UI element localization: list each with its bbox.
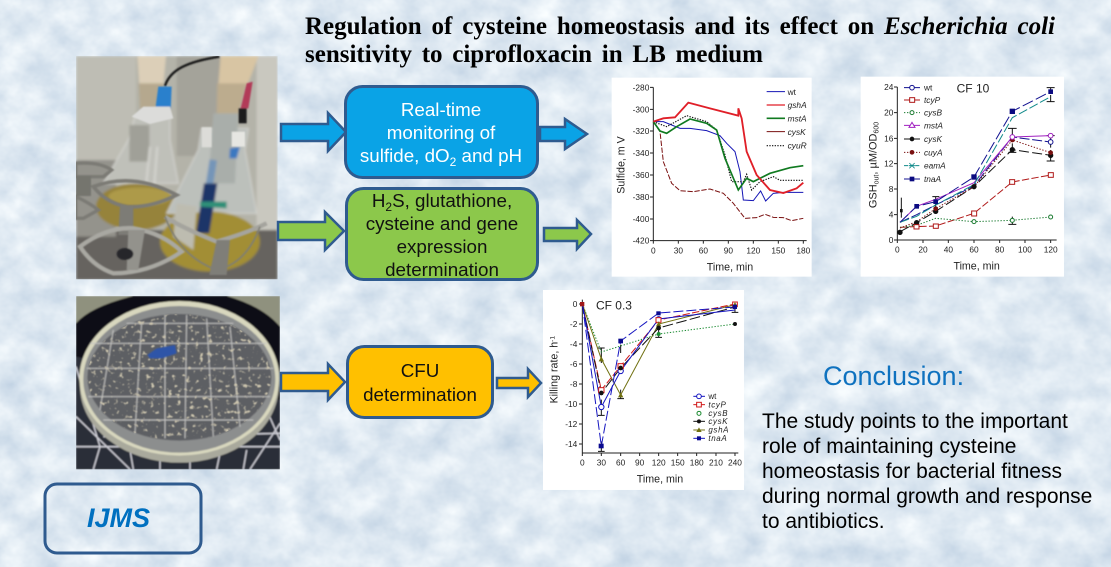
chart: sulfide over time: 180 [796, 245, 811, 255]
box: real-time monitoring: monitoring of [387, 122, 496, 143]
legend: tcyP [708, 400, 727, 409]
chart: GSH out at CF 10: 0 [895, 245, 900, 255]
chart: killing rate at CF 0.3: -10 [565, 399, 578, 409]
legend: cysB [708, 409, 728, 418]
chart: GSH out at CF 10: 120 [1044, 245, 1058, 255]
chart: sulfide over time: Time, min [707, 262, 753, 274]
chart: GSH out at CF 10: , µM/OD [868, 133, 880, 175]
chart: sulfide over time: 90 [724, 245, 733, 255]
chart: GSH out at CF 10: 80 [995, 245, 1005, 255]
chart: killing rate at CF 0.3: 90 [635, 458, 645, 468]
arrow: orange into CFU box [281, 364, 345, 400]
chart: killing rate at CF 0.3: 240 [728, 458, 742, 468]
legend: eamA [924, 161, 946, 171]
chart: sulfide over time: -380 [633, 192, 650, 202]
box: CFU determination: CFU [401, 360, 439, 381]
chart: GSH out at CF 10: 100 [1018, 245, 1032, 255]
series lines [900, 92, 1051, 232]
chart: GSH out at CF 10: 20 [918, 245, 928, 255]
conclusion text: to antibiotics. [762, 510, 885, 533]
chart: killing rate at CF 0.3: -8 [570, 379, 578, 389]
arrow: blue to sulfide chart [540, 119, 587, 149]
chart: GSH out at CF 10: 8 [889, 184, 894, 194]
chart: GSH out at CF 10: 0 [889, 235, 894, 245]
legend: tcyP [924, 95, 941, 105]
series markers [897, 89, 1053, 235]
chart: sulfide over time: cyuR [788, 141, 807, 151]
chart: killing rate at CF 0.3: 0 [580, 458, 585, 468]
conclusion text: homeostasis for bacterial fitness [762, 460, 1062, 483]
chart: killing rate at CF 0.3: CF 0.3 [596, 299, 632, 313]
box: gene expression determination: H [372, 190, 385, 211]
box: real-time monitoring: sulfide, dO [360, 145, 450, 166]
box: real-time monitoring: and pH [456, 145, 522, 166]
legend: mstA [924, 120, 943, 130]
chart: GSH out at CF 10: 40 [944, 245, 953, 255]
chart: killing rate at CF 0.3: 120 [652, 458, 666, 468]
journal badge: IJMS: IJMS [87, 503, 150, 533]
chart: sulfide over time: -420 [633, 236, 650, 246]
chart: sulfide over time [612, 78, 812, 277]
chart: sulfide over time: 60 [699, 245, 708, 255]
box: gene expression determination: determination [385, 259, 499, 280]
box: CFU determination: determination [363, 384, 477, 405]
legend: tnaA [924, 174, 942, 184]
legend: wt [923, 82, 933, 92]
chart: killing rate at CF 0.3: -12 [565, 419, 578, 429]
chart: sulfide over time: -340 [633, 148, 650, 158]
chart: sulfide over time: -300 [633, 104, 650, 114]
box: gene expression determination: cysteine and gene [366, 213, 518, 234]
chart: GSH out at CF 10: 4 [889, 210, 894, 220]
legend: cysK [708, 417, 728, 426]
chart: killing rate at CF 0.3: -2 [570, 319, 578, 329]
chart: sulfide over time: -320 [633, 126, 650, 136]
chart: killing rate at CF 0.3: 180 [690, 458, 704, 468]
chart: killing rate at CF 0.3: Killing rate, h [549, 342, 561, 403]
arrow: blue into monitoring box [281, 113, 346, 151]
title line 1: Regulation of cysteine homeostasis and its effect on Escherichia coli [305, 13, 1055, 40]
box: gene expression determination [346, 188, 538, 280]
chart: sulfide over time: 120 [746, 245, 761, 255]
chart: GSH out at CF 10: CF 10 [957, 81, 990, 95]
chart: GSH out at CF 10: 16 [884, 133, 894, 143]
chart: GSH out at CF 10: 600 [874, 122, 881, 133]
chart: killing rate at CF 0.3: 60 [616, 458, 626, 468]
box: real-time monitoring: Real-time [401, 99, 481, 120]
chart: killing rate at CF 0.3: -4 [570, 339, 578, 349]
photo: flasks with probes [76, 56, 278, 280]
conclusion text: during normal growth and response [762, 485, 1092, 508]
arrow: green to GSH chart [544, 220, 591, 249]
arrow: orange to killing rate chart [497, 369, 541, 397]
chart: sulfide over time: mstA [788, 114, 807, 124]
series markers [580, 302, 738, 448]
chart: killing rate at CF 0.3: 0 [573, 299, 578, 309]
chart: killing rate at CF 0.3: -1 [549, 336, 556, 342]
legend: wt [707, 392, 717, 401]
chart: killing rate at CF 0.3: 30 [597, 458, 606, 468]
chart: sulfide over time: -280 [633, 82, 650, 92]
chart: sulfide over time: wt [787, 87, 797, 97]
chart: killing rate at CF 0.3: 150 [671, 458, 685, 468]
photo: agar plate with colonies [76, 296, 283, 469]
conclusion text: The study points to the important [762, 410, 1068, 433]
chart: GSH out at CF 10 [861, 77, 1064, 277]
chart: sulfide over time: 0 [651, 245, 656, 255]
chart: sulfide over time: -360 [633, 170, 650, 180]
legend: tnaA [708, 434, 727, 443]
legend: cysB [924, 108, 942, 118]
chart: GSH out at CF 10: out [874, 175, 881, 184]
chart: killing rate at CF 0.3 [543, 290, 744, 490]
box: gene expression determination: S, glutathione, [392, 190, 512, 211]
chart: sulfide over time: cysK [788, 127, 806, 137]
arrow: green into determination box [278, 212, 344, 250]
chart: sulfide over time: 30 [674, 245, 683, 255]
chart: killing rate at CF 0.3: -6 [570, 359, 578, 369]
legend [904, 82, 946, 184]
chart: GSH out at CF 10: 20 [884, 108, 894, 118]
conclusion text: role of maintaining cysteine [762, 435, 1016, 458]
box: real-time monitoring: 2 [450, 155, 457, 169]
conclusion text [762, 410, 1092, 533]
box: gene expression determination: expression [397, 236, 487, 257]
journal badge: IJMS [45, 484, 201, 553]
title line 2: sensitivity to ciprofloxacin in LB medium [305, 41, 763, 68]
heading: conclusion: Conclusion: [823, 361, 964, 391]
chart: killing rate at CF 0.3: 210 [709, 458, 723, 468]
chart: GSH out at CF 10: Time, min [953, 260, 1000, 272]
chart: sulfide over time: gshA [788, 100, 807, 110]
legend [693, 392, 729, 443]
chart: sulfide over time: -400 [633, 214, 650, 224]
chart: GSH out at CF 10: 60 [969, 245, 979, 255]
chart: GSH out at CF 10: 24 [884, 82, 894, 92]
chart: GSH out at CF 10: 12 [884, 159, 894, 169]
chart: killing rate at CF 0.3: Time, min [637, 473, 683, 485]
chart: GSH out at CF 10: GSH [868, 184, 880, 208]
box: gene expression determination: 2 [385, 200, 392, 214]
chart: killing rate at CF 0.3: -14 [565, 439, 578, 449]
legend: cuyA [924, 147, 943, 157]
legend: gshA [708, 426, 729, 435]
chart: sulfide over time: Sulfide, m V [616, 135, 628, 194]
box: CFU determination [348, 346, 492, 418]
legend: cysK [924, 134, 942, 144]
chart: sulfide over time: 150 [771, 245, 786, 255]
series lines [582, 304, 735, 446]
box: real-time monitoring [346, 86, 538, 178]
